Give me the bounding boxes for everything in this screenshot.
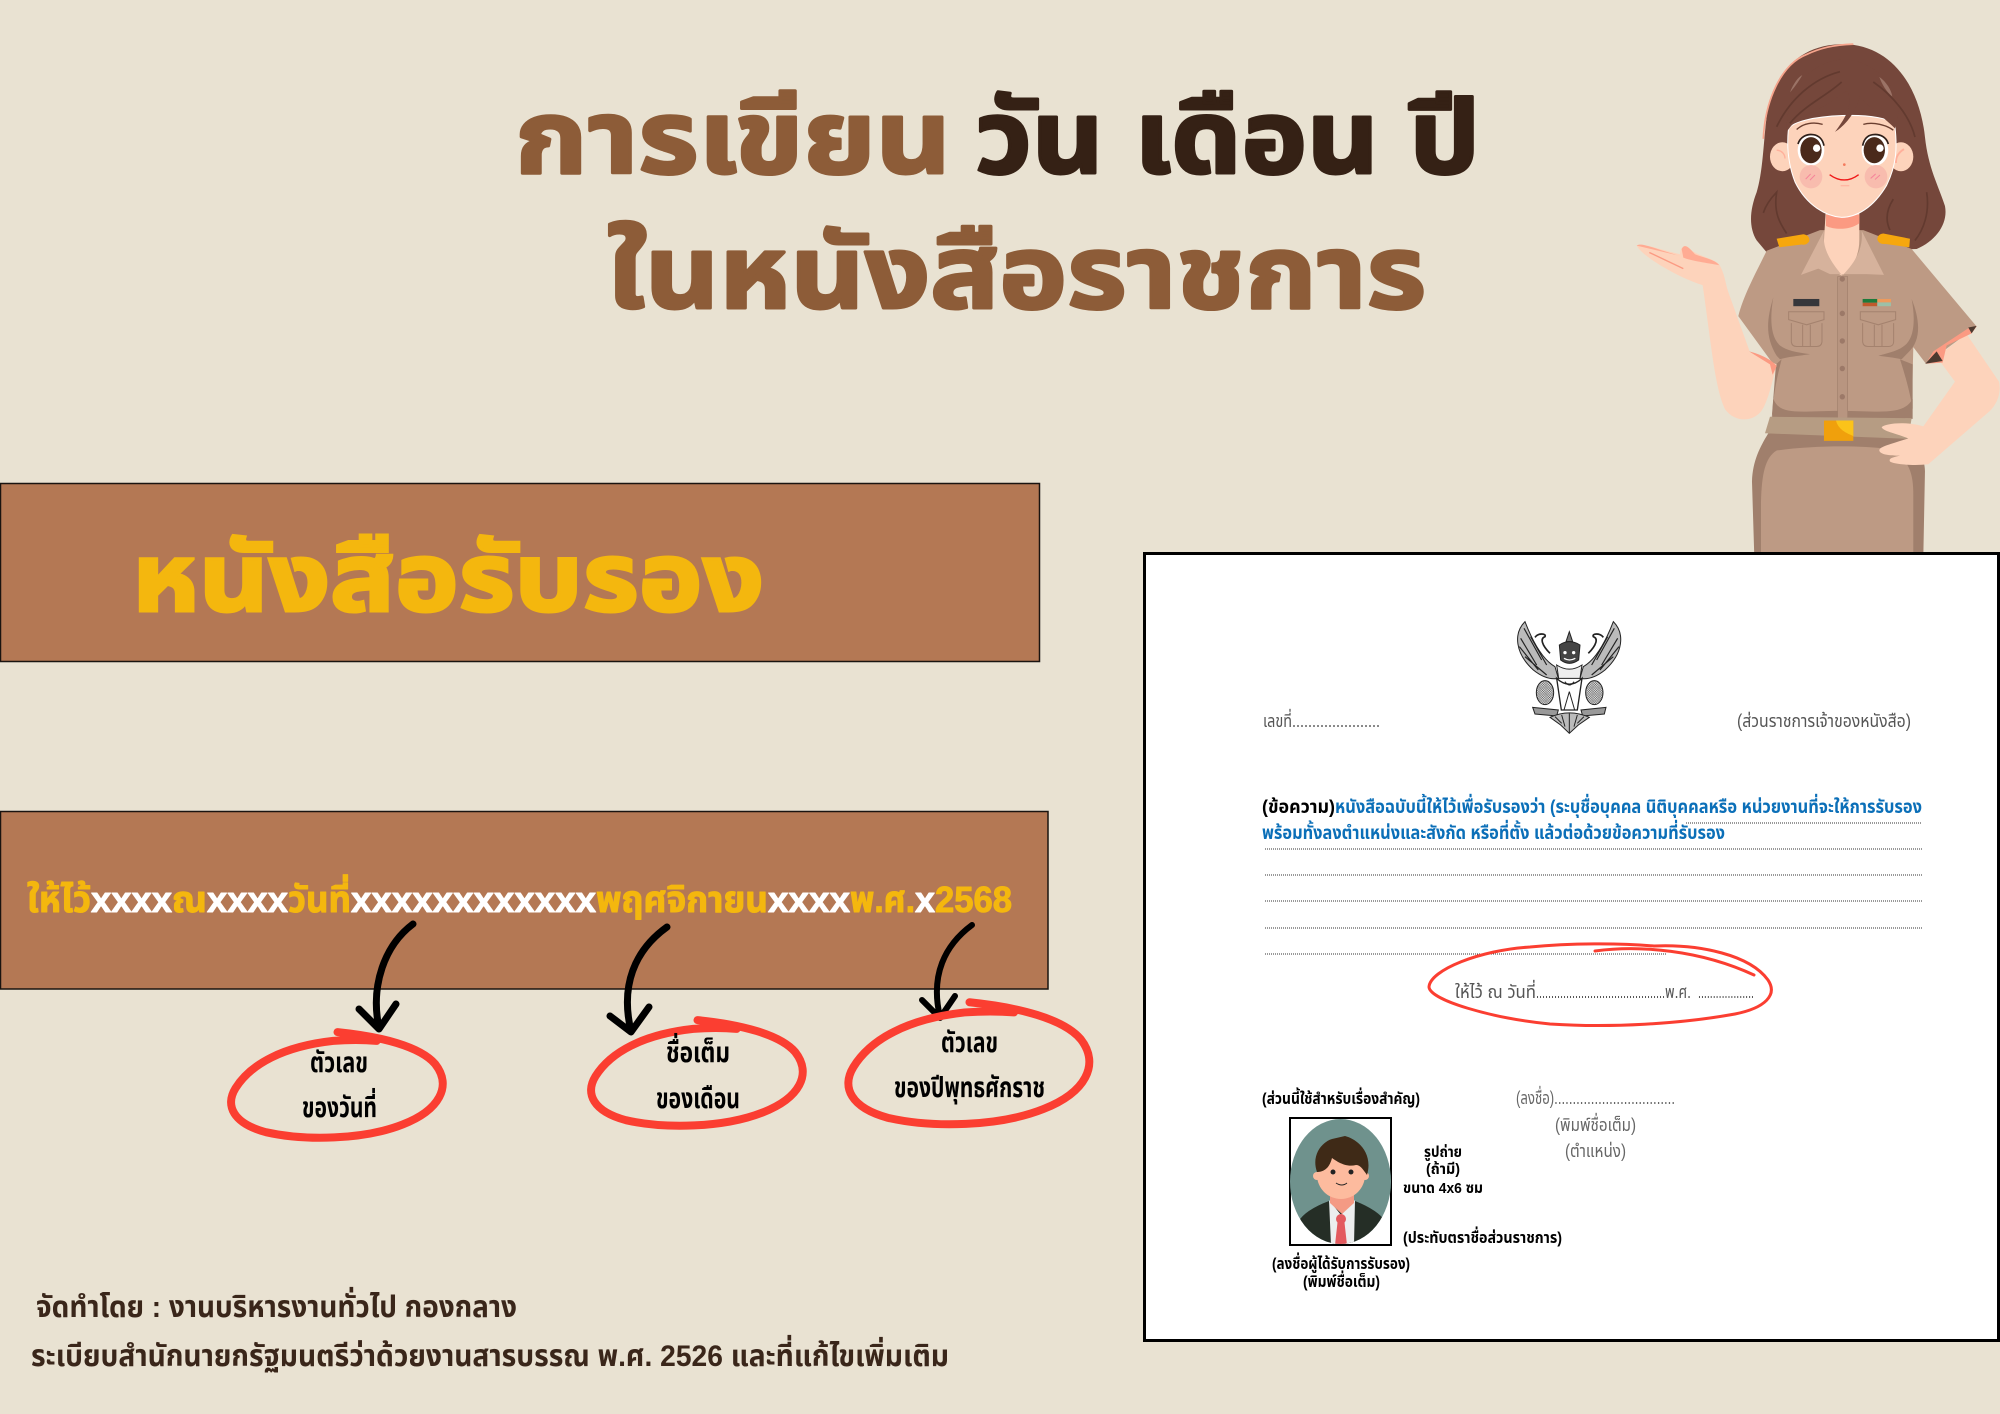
right arm and hand <box>1879 334 2000 465</box>
photo caption: รูปถ่าย <box>1424 1143 1462 1162</box>
date line text: พฤศจิกายน <box>596 879 768 920</box>
collar <box>1801 231 1884 276</box>
date line text <box>27 874 1012 920</box>
signature block <box>1516 1085 1675 1161</box>
body text: พร้อมทั้งลงตำแหน่งและสังกัด หรือที่ตั้ง แล้วต่อด้วยข้อความที่รับรอง <box>1262 819 1725 843</box>
photo caption: ขนาด 4x6 ซม <box>1403 1180 1483 1197</box>
panel: date line example <box>0 812 1048 989</box>
shirt <box>1738 230 1977 416</box>
signature block: (ลงชื่อ)................................. <box>1516 1085 1675 1108</box>
arrow: to year <box>922 925 972 1018</box>
title <box>515 81 1480 330</box>
panel: letter type heading <box>0 484 1040 662</box>
title: การเขียน <box>515 81 951 195</box>
heading: certificate: หนังสือรับรอง <box>132 526 764 632</box>
eyes <box>1798 135 1824 166</box>
date line text: 2568 <box>935 879 1012 920</box>
photo of man <box>1290 1118 1391 1245</box>
callout: day number <box>231 1032 443 1138</box>
left arm and hand <box>1637 245 1777 419</box>
date line text: x <box>915 879 935 920</box>
date line in document: ........................................... <box>1536 982 1665 1002</box>
date line text: วันที่ <box>288 874 351 920</box>
ears <box>1770 142 1795 171</box>
date line in document: ให้ไว้ ณ วันที่ <box>1455 979 1536 1002</box>
icon: Garuda emblem <box>1518 622 1621 733</box>
callout: Buddhist year: ของปีพุทธศักราช <box>894 1072 1045 1104</box>
callout: month name <box>591 1020 803 1126</box>
signature block: (พิมพ์ชื่อเต็ม) <box>1555 1112 1636 1135</box>
hair back <box>1751 44 1946 254</box>
date line text: xxxx <box>91 879 172 920</box>
illustration: civil servant woman <box>1637 44 2000 557</box>
date line text: ให้ไว้ <box>27 879 91 920</box>
date line text: xxxx <box>768 879 850 920</box>
shirt buttons <box>1840 276 1845 400</box>
footer credits: ระเบียบสำนักนายกรัฐมนตรีว่าด้วยงานสารบรรณ พ.ศ. 2526 และที่แก้ไขเพิ่มเติม <box>31 1334 949 1373</box>
date line in document: ................... <box>1698 982 1754 1002</box>
epaulettes <box>1777 234 1809 247</box>
document number: เลขที่...................... <box>1263 708 1380 731</box>
red circle around date line <box>1429 944 1771 1026</box>
date line text: พ.ศ. <box>850 879 915 920</box>
face <box>1788 115 1896 217</box>
agency stamp note: (ประทับตราชื่อส่วนราชการ) <box>1403 1226 1562 1247</box>
recipient signature note <box>1272 1252 1410 1291</box>
bangs <box>1787 60 1900 132</box>
date line text: ณ <box>172 879 207 920</box>
pockets <box>1789 312 1896 346</box>
cheeks <box>1800 165 1822 188</box>
recipient signature note: (ลงชื่อผู้ได้รับการรับรอง) <box>1272 1252 1410 1274</box>
nose and mouth <box>1843 163 1846 166</box>
arrow: to month name <box>610 927 667 1032</box>
arrow: to day number <box>359 924 413 1029</box>
neck <box>1824 206 1859 276</box>
photo caption: (ถ้ามี) <box>1426 1160 1460 1178</box>
title: วัน เดือน ปี <box>975 81 1480 195</box>
document number <box>1263 708 1911 731</box>
callout: month name: ของเดือน <box>656 1083 740 1114</box>
body text: (ข้อความ) <box>1262 796 1335 817</box>
footer credits <box>31 1286 949 1373</box>
recipient signature note: (พิมพ์ชื่อเต็ม) <box>1303 1270 1380 1291</box>
eyebrows <box>1797 123 1893 130</box>
body text: หนังสือฉบับนี้ให้ไว้เพื่อรับรองว่า (ระบุชื่อบุคคล นิติบุคคลหรือ หน่วยงานที่จะให้การรับรอง <box>1335 793 1922 818</box>
belt <box>1765 417 1912 439</box>
body text <box>1262 793 1922 843</box>
date line text: xxxx <box>207 879 288 920</box>
callout: month name: ชื่อเต็ม <box>666 1032 730 1068</box>
photo caption <box>1403 1143 1483 1197</box>
date line in document <box>1455 979 1754 1002</box>
issuing agency: (ส่วนราชการเจ้าของหนังสือ) <box>1737 711 1911 731</box>
signature block: (ตำแหน่ง) <box>1565 1141 1626 1161</box>
date line text: xxxxxxxxxxxx <box>351 879 596 920</box>
panel: certificate document form <box>1144 554 1998 1340</box>
callout: day number: ของวันที่ <box>302 1087 377 1123</box>
callout: day number: ตัวเลข <box>310 1047 368 1078</box>
callout: Buddhist year <box>848 1002 1089 1124</box>
title: ในหนังสือราชการ <box>607 216 1426 330</box>
name tag and ribbons <box>1793 299 1819 306</box>
footer credits: จัดทำโดย : งานบริหารงานทั่วไป กองกลาง <box>36 1286 517 1324</box>
date line in document: พ.ศ. <box>1665 982 1691 1002</box>
skirt <box>1752 433 1925 557</box>
important matters note: (ส่วนนี้ใช้สำหรับเรื่องสำคัญ) <box>1262 1087 1420 1108</box>
callout: Buddhist year: ตัวเลข <box>941 1027 998 1058</box>
